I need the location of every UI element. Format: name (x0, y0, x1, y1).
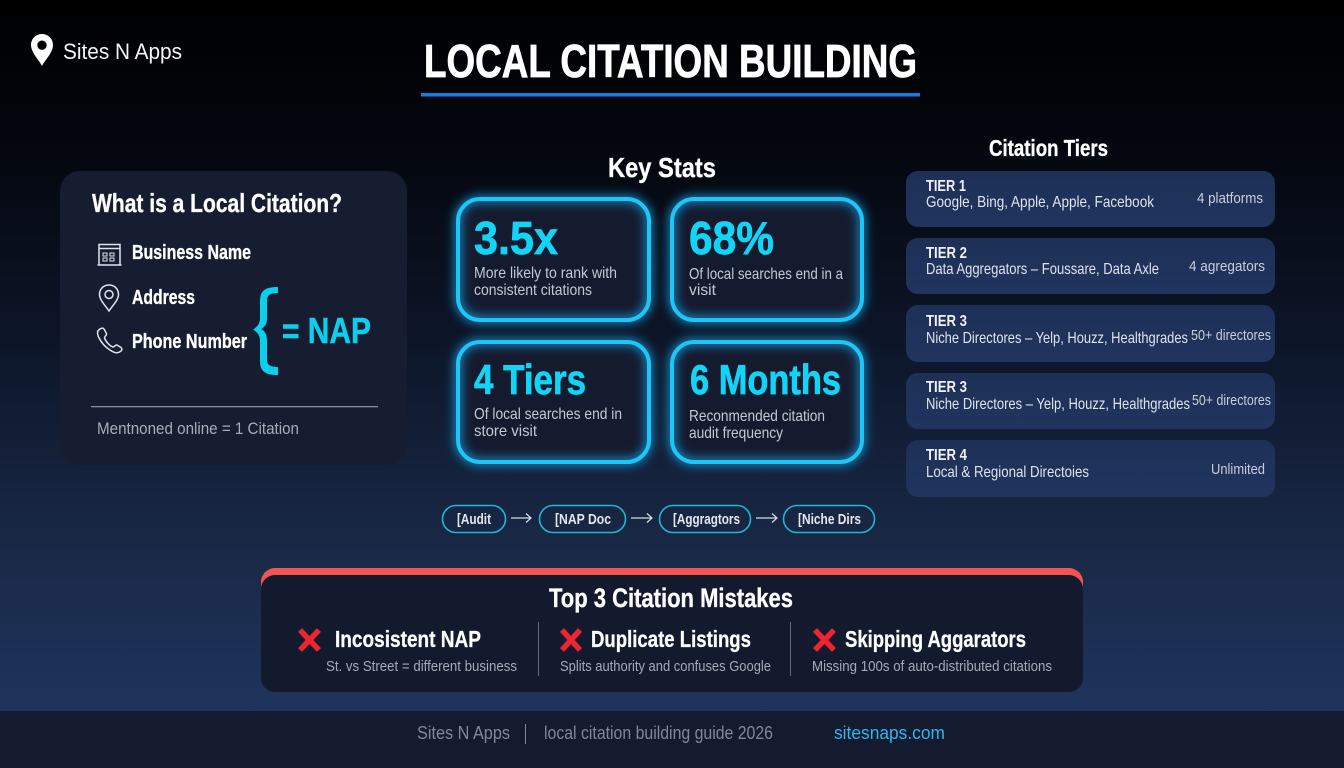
card glow (672, 199, 862, 320)
phone number: Phone Number (132, 331, 247, 353)
definition note: Mentnoned online = 1 Citation (97, 419, 299, 438)
step: audit: [Audit (457, 511, 491, 528)
stat card: 3.5x (458, 199, 649, 320)
citation tiers heading: Citation Tiers (989, 135, 1108, 161)
mistake: duplicate listings (560, 626, 771, 675)
mistake: inconsistent NAP: Incosistent NAP (335, 626, 481, 652)
tier row 4 (906, 440, 1275, 497)
stat value: 6 Months (690, 356, 841, 403)
step: audit (442, 506, 506, 532)
panel heading: Top 3 Citation Mistakes (549, 583, 793, 613)
card fill (458, 342, 649, 462)
footer brand: Sites N Apps (417, 723, 510, 743)
stat card: 68% (672, 199, 862, 320)
card glow (672, 342, 862, 462)
icon: building (98, 244, 122, 265)
card frame (458, 342, 649, 462)
stat card: 4 Tiers (458, 342, 649, 462)
icon: map pin (31, 34, 53, 66)
icon: phone (97, 328, 122, 353)
tier row 1 (906, 171, 1275, 227)
arrow (511, 514, 531, 522)
brace (253, 287, 278, 375)
logo (31, 34, 182, 66)
card frame (672, 199, 862, 320)
divider (91, 406, 378, 407)
card fill (672, 342, 862, 462)
stat description line 2: audit frequency (689, 425, 783, 442)
tier row 4: Unlimited (1211, 461, 1265, 478)
stat description line 2: visit (689, 282, 717, 299)
step: niche dirs (784, 506, 874, 532)
icon: address pin (100, 285, 118, 311)
tier row 3: TIER 3 (926, 313, 967, 330)
panel: top 3 citation mistakes (261, 568, 1083, 692)
tier row 1: Google, Bing, Apple, Apple, Facebook (926, 194, 1155, 211)
card glow (458, 199, 649, 320)
footer description: local citation building guide 2026 (544, 723, 773, 743)
mistake: skipping aggregators (812, 626, 1052, 675)
panel heading: What is a Local Citation? (92, 188, 342, 218)
card frame (458, 199, 649, 320)
mistake: skipping aggregators: Missing 100s of auto-distributed citations (812, 658, 1052, 675)
step: niche dirs: [Niche Dirs (798, 511, 861, 528)
process flow (442, 506, 874, 532)
stat description line 2: store visit (474, 423, 538, 440)
title underline (421, 93, 920, 96)
tier row 1: TIER 1 (926, 178, 966, 195)
stat description line 2: consistent citations (474, 282, 592, 299)
arrow (631, 514, 652, 522)
stat card: 6 Months (672, 342, 862, 462)
footer divider (525, 724, 526, 744)
stat description: More likely to rank with (474, 265, 617, 282)
card fill (672, 199, 862, 320)
step: aggregators: [Aggragtors (673, 511, 740, 528)
tier row 3 repeated: 50+ directores (1192, 392, 1271, 409)
footer link: sitesnaps.com (834, 723, 945, 743)
tier row 3 repeated (906, 373, 1275, 429)
panel: what is a local citation (60, 171, 407, 465)
tier row 4: TIER 4 (926, 447, 967, 464)
address: Address (132, 287, 195, 309)
tier row 3 repeated: TIER 3 (926, 379, 967, 396)
key stats heading: Key Stats (608, 152, 716, 183)
divider (538, 622, 539, 676)
mistake: duplicate listings: Splits authority and confuses Google (560, 658, 771, 675)
tier row 3 (906, 305, 1275, 362)
tier row 2: Data Aggregators – Foussare, Data Axle (926, 261, 1159, 278)
stat description: Of local searches end in (474, 406, 622, 423)
step: aggregators (660, 506, 750, 532)
stat value: 4 Tiers (474, 356, 586, 403)
title (421, 35, 920, 96)
tier row 2: TIER 2 (926, 245, 967, 262)
divider (790, 622, 791, 676)
tier row 3: Niche Directores – Yelp, Houzz, Healthgrades (926, 330, 1188, 347)
tier row 1: 4 platforms (1197, 190, 1263, 207)
business name: Business Name (132, 242, 251, 264)
stat description: Reconmended citation (689, 408, 825, 425)
mistake: skipping aggregators: Skipping Aggarators (845, 626, 1026, 652)
step: NAP doc: [NAP Doc (555, 511, 611, 528)
mistake: inconsistent NAP: St. vs Street = different business (326, 658, 517, 675)
panel background (261, 575, 1083, 692)
tier row 2: 4 agregators (1189, 258, 1265, 275)
card fill (458, 199, 649, 320)
card glow (458, 342, 649, 462)
red top accent (261, 568, 1083, 618)
logo text: Sites N Apps (63, 39, 182, 64)
mistake: inconsistent NAP (300, 626, 517, 675)
card frame (672, 342, 862, 462)
step: NAP doc (540, 506, 626, 532)
stat value: 68% (689, 212, 774, 264)
arrow (756, 514, 777, 522)
panel background (60, 171, 407, 465)
tier row 4: Local & Regional Directoies (926, 464, 1089, 481)
title text: LOCAL CITATION BUILDING (424, 35, 917, 87)
tier row 3: 50+ directores (1191, 327, 1271, 344)
stat description: Of local searches end in a (689, 266, 843, 283)
footer bar (0, 711, 1344, 768)
tier row 3 repeated: Niche Directores – Yelp, Houzz, Healthgrades (926, 396, 1190, 413)
stat value: 3.5x (474, 212, 558, 264)
mistake: duplicate listings: Duplicate Listings (591, 626, 751, 652)
equals NAP: = NAP (282, 310, 371, 351)
footer (0, 711, 1344, 768)
tier row 2 (906, 238, 1275, 294)
